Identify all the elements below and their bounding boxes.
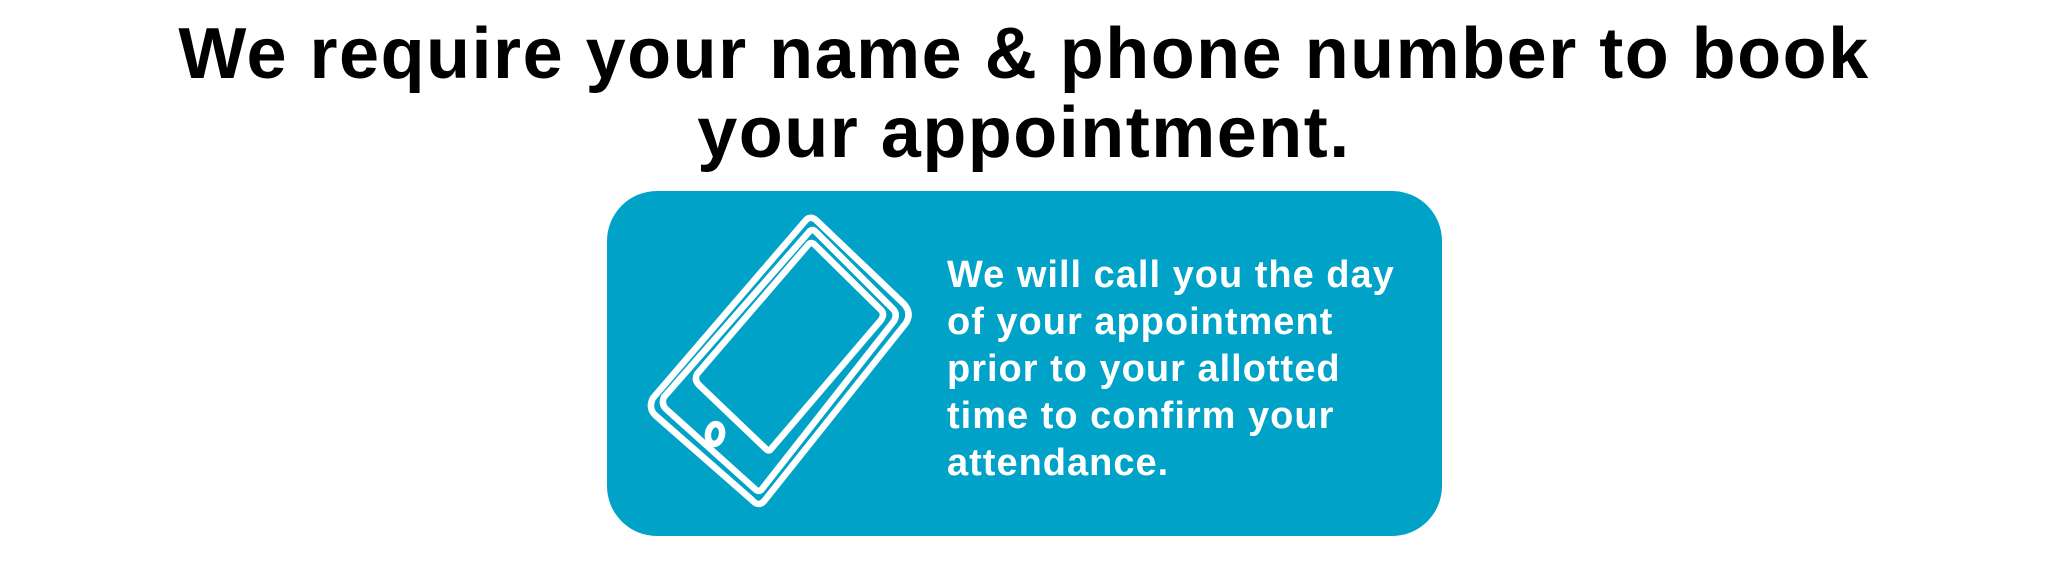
text block: prior to your allotted xyxy=(947,348,1341,390)
text block xyxy=(947,254,1395,484)
title: We require your name & phone number to book xyxy=(178,14,1870,94)
text block: of your appointment xyxy=(947,301,1333,343)
title xyxy=(178,14,1870,173)
icon: phone xyxy=(648,214,912,508)
title: your appointment. xyxy=(697,93,1351,173)
text block: attendance. xyxy=(947,442,1169,484)
text block: time to confirm your xyxy=(947,395,1334,437)
panel: call notice xyxy=(607,191,1442,536)
text block: We will call you the day xyxy=(947,254,1395,296)
